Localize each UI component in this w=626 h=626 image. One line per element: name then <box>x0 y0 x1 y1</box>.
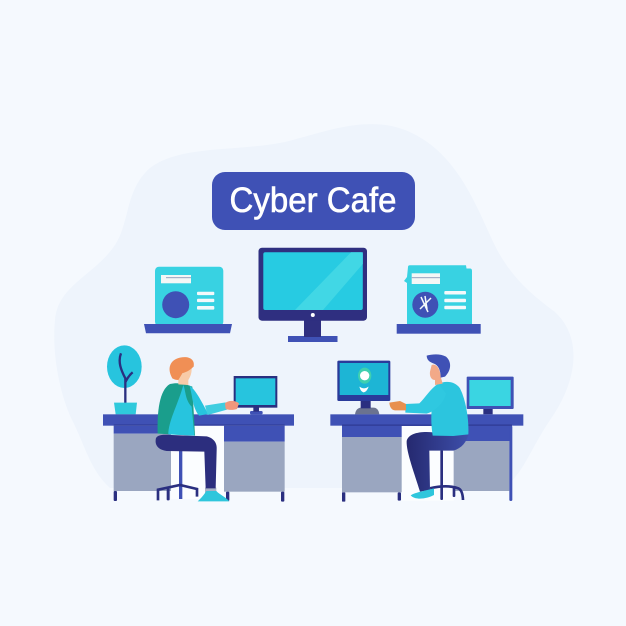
desk <box>103 414 294 502</box>
seated person with blue hair <box>389 354 468 499</box>
left workstation <box>103 345 294 502</box>
large monitor with logo <box>337 361 390 414</box>
heading: Cyber Cafe: Cyber Cafe <box>230 181 396 220</box>
heading: Cyber Cafe <box>212 172 415 230</box>
background blob <box>54 124 574 488</box>
potted plant <box>107 345 142 414</box>
white gap under desk <box>171 426 224 499</box>
stool <box>158 447 205 500</box>
desk <box>330 414 523 502</box>
right workstation <box>330 354 523 502</box>
stool <box>430 450 463 500</box>
small monitor <box>467 377 514 414</box>
central monitor <box>258 248 367 342</box>
white gap under desk <box>402 426 454 501</box>
seated person with orange hair <box>156 357 239 501</box>
right info card <box>397 265 481 334</box>
small monitor <box>234 376 277 414</box>
left info card <box>144 267 232 333</box>
